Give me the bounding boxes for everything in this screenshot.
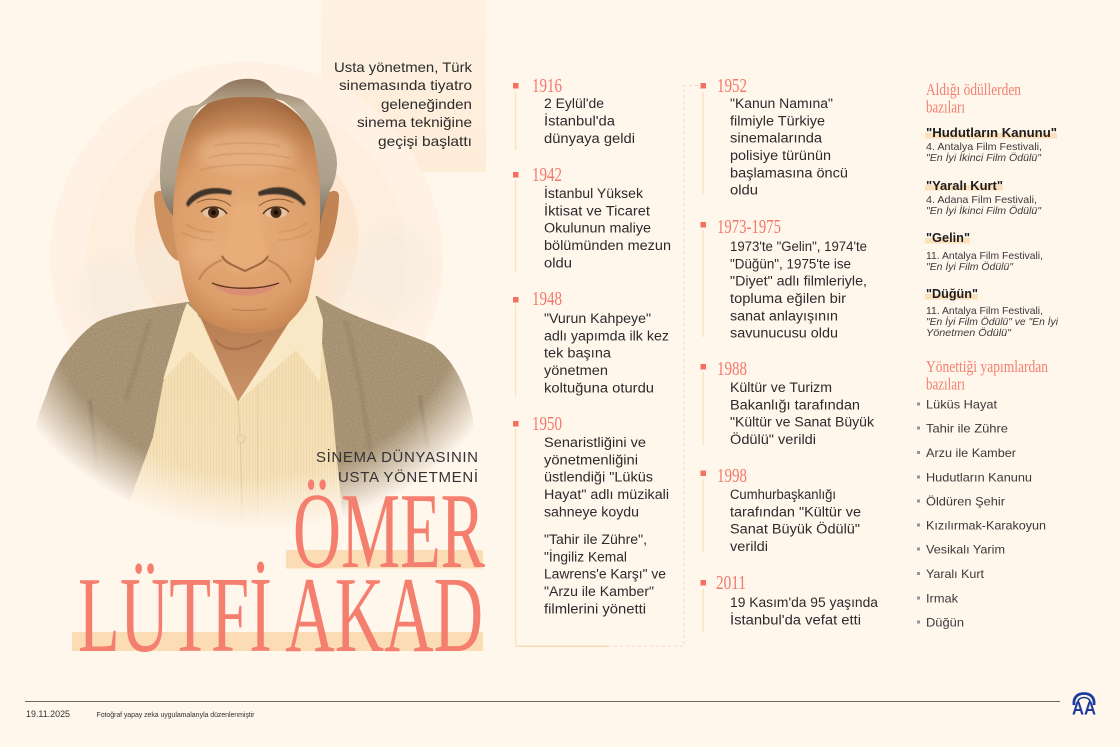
filmography panel bbox=[917, 357, 1048, 630]
quote text: sinemasında tiyatro bbox=[339, 77, 472, 93]
face bbox=[172, 92, 321, 333]
film list: Yaralı Kurt bbox=[926, 567, 985, 581]
event: 2011: 19 Kasım'da 95 yaşında bbox=[730, 595, 879, 610]
event: 1988: Bakanlığı tarafından bbox=[730, 397, 860, 412]
filmography heading: Yönettiği yapımlardan bbox=[926, 357, 1048, 376]
award: Düğün: Yönetmen Ödülü" bbox=[926, 327, 1012, 339]
portrait illustration bbox=[30, 62, 480, 540]
quote text: geçişi başlattı bbox=[378, 133, 472, 149]
event: 1950: sahneye koydu bbox=[544, 504, 639, 519]
event: 1950: "Tahir ile Zühre", bbox=[544, 532, 647, 547]
ears bbox=[154, 191, 339, 261]
event: 1973-1975: 1973'te "Gelin", 1974'te bbox=[730, 239, 867, 254]
film list: Tahir ile Zühre bbox=[926, 422, 1008, 436]
event: 1942: İstanbul Yüksek bbox=[544, 186, 643, 201]
film list: Irmak bbox=[926, 592, 959, 606]
timeline column 1 bbox=[513, 75, 671, 646]
watercolor washes bbox=[74, 222, 435, 335]
film list: Arzu ile Kamber bbox=[926, 446, 1016, 460]
event: 1942: 1942 bbox=[532, 164, 562, 186]
award: Gelin: "Gelin" bbox=[926, 230, 970, 245]
event: 2011: 2011 bbox=[716, 572, 746, 594]
award: Yaralı Kurt: 4. Adana Film Festivali, bbox=[926, 194, 1037, 206]
awards heading: Aldığı ödüllerden bbox=[926, 80, 1021, 99]
title: name: LÜTFİ AKAD bbox=[78, 556, 483, 675]
event: 1998: 1998 bbox=[717, 465, 747, 487]
event: 1988: Ödülü" verildi bbox=[730, 432, 816, 447]
event: 1988: 1988 bbox=[717, 358, 747, 380]
title: name bbox=[72, 472, 485, 675]
event: 1988: "Kültür ve Sanat Büyük bbox=[730, 415, 874, 430]
event: 1973-1975: "Düğün", 1975'te ise bbox=[730, 256, 851, 271]
award: Gelin bbox=[925, 230, 1043, 273]
event: 1950: "İngiliz Kemal bbox=[544, 549, 627, 564]
quote background panel bbox=[321, 0, 486, 172]
award: Yaralı Kurt: "Yaralı Kurt" bbox=[926, 178, 1003, 193]
event: 1950: yönetmenliğini bbox=[544, 452, 638, 467]
award: Gelin: 11. Antalya Film Festivali, bbox=[926, 250, 1043, 262]
award: Düğün: "En İyi Film Ödülü" ve "En İyi bbox=[926, 316, 1059, 328]
event: 1942: İktisat ve Ticaret bbox=[544, 203, 650, 218]
shirt button bbox=[237, 435, 245, 443]
event: 1998: verildi bbox=[730, 539, 768, 554]
eyebrows bbox=[186, 187, 306, 207]
eyes bbox=[197, 199, 293, 218]
forehead wrinkles bbox=[200, 143, 296, 170]
award: Hudutların Kanunu: "En İyi İkinci Film Ödülü" bbox=[926, 152, 1042, 164]
event: 1973-1975: topluma eğilen bir bbox=[730, 291, 847, 306]
event: 1948: adlı yapımda ilk kez bbox=[544, 328, 669, 343]
event: 1916: 2 Eylül'de bbox=[544, 96, 604, 111]
event: 1973-1975: savunucusu oldu bbox=[730, 326, 838, 341]
event: 1950: Senaristliğini ve bbox=[544, 435, 646, 450]
event: 1998: tarafından "Kültür ve bbox=[730, 504, 861, 519]
award: Hudutların Kanunu bbox=[925, 125, 1057, 164]
event: 1950: üstlendiği "Lüküs bbox=[544, 470, 653, 485]
event: 1950: 1950 bbox=[532, 413, 562, 435]
event: 1942: bölümünden mezun bbox=[544, 238, 671, 253]
filmography heading: bazıları bbox=[926, 374, 965, 394]
event: 1948: 1948 bbox=[532, 288, 562, 310]
quote text: Usta yönetmen, Türk bbox=[334, 59, 473, 75]
film list: Lüküs Hayat bbox=[926, 398, 998, 412]
event: 1952: 1952 bbox=[717, 75, 747, 97]
event: 1952: polisiye türünün bbox=[730, 148, 831, 163]
event: 1916: 1916 bbox=[532, 75, 562, 97]
event: 1988: Kültür ve Turizm bbox=[730, 380, 832, 395]
hair bbox=[160, 79, 337, 224]
event: 1952: oldu bbox=[730, 183, 758, 198]
body with cardigan and shirt bbox=[36, 288, 474, 524]
award: Gelin: "En İyi Film Ödülü" bbox=[926, 261, 1014, 273]
event: 1950: "Arzu ile Kamber" bbox=[544, 584, 654, 599]
shirt collar bbox=[163, 303, 238, 402]
event: 1948: "Vurun Kahpeye" bbox=[544, 311, 651, 326]
event: 1948 bbox=[513, 288, 669, 397]
event: 2011: İstanbul'da vefat etti bbox=[730, 612, 861, 627]
event: 1952: filmiyle Türkiye bbox=[730, 113, 825, 128]
cheek folds bbox=[199, 260, 291, 283]
event: 1952 bbox=[700, 75, 848, 198]
mouth bbox=[212, 283, 279, 310]
event: 1952: "Kanun Namına" bbox=[730, 96, 833, 111]
filmography heading bbox=[926, 357, 1048, 394]
title: name: ÖMER bbox=[293, 472, 485, 591]
event: 1942: Okulunun maliye bbox=[544, 221, 651, 236]
award: Düğün: "Düğün" bbox=[926, 286, 978, 301]
event: 1973-1975 bbox=[700, 216, 867, 341]
event: 1916: İstanbul'da bbox=[544, 114, 616, 128]
event: 1973-1975: sanat anlayışının bbox=[730, 308, 838, 323]
quote text: geleneğinden bbox=[381, 96, 472, 112]
film list: Hudutların Kanunu bbox=[926, 470, 1032, 484]
event: 1998: Sanat Büyük Ödülü" bbox=[730, 522, 860, 537]
event: 2011 bbox=[700, 572, 879, 632]
event: 1916 bbox=[513, 75, 635, 150]
neck bbox=[200, 316, 289, 402]
event: 1942 bbox=[513, 164, 671, 272]
event: 1950: filmlerini yönetti bbox=[544, 601, 646, 616]
award: Düğün: 11. Antalya Film Festivali, bbox=[926, 305, 1043, 317]
event: 1948: yönetmen bbox=[544, 363, 608, 378]
event: 1952: başlamasına öncü bbox=[730, 165, 848, 180]
subtitle bbox=[316, 448, 478, 486]
event: 1948: koltuğuna oturdu bbox=[544, 380, 654, 395]
inner halo circle bbox=[134, 128, 358, 352]
event: 1973-1975: "Diyet" adlı filmleriyle, bbox=[730, 274, 867, 289]
event: 1948: tek başına bbox=[544, 346, 612, 361]
event: 1916: dünyaya geldi bbox=[544, 131, 635, 146]
quote text bbox=[334, 59, 473, 149]
event: 1950 bbox=[513, 413, 669, 646]
event: 1973-1975: 1973-1975 bbox=[717, 216, 781, 238]
event: 1998: Cumhurbaşkanlığı bbox=[730, 487, 836, 502]
outer halo circle bbox=[50, 62, 442, 454]
event: 1988 bbox=[700, 358, 874, 447]
nose bbox=[222, 205, 268, 272]
event: 1998 bbox=[700, 465, 861, 554]
event: 1950: Lawrens'e Karşı" ve bbox=[544, 567, 666, 582]
middle halo circle bbox=[86, 98, 406, 418]
award: Düğün bbox=[925, 286, 1059, 339]
footer note: Fotoğraf yapay zeka uygulamalarıyla düzenlenmiştir bbox=[96, 712, 255, 719]
award: Yaralı Kurt: "En İyi İkinci Film Ödülü" bbox=[926, 205, 1042, 217]
icon: AA logo: AA bbox=[1072, 698, 1096, 718]
timeline connector bbox=[515, 86, 702, 647]
film list: Vesikalı Yarim bbox=[926, 542, 1005, 556]
subtitle: SİNEMA DÜNYASININ bbox=[316, 448, 478, 466]
award: Hudutların Kanunu: 4. Antalya Film Festivali, bbox=[926, 141, 1042, 153]
film list bbox=[917, 398, 1046, 630]
event: 1942: oldu bbox=[544, 255, 572, 270]
film list: Düğün bbox=[926, 616, 964, 630]
subtitle: USTA YÖNETMENİ bbox=[338, 468, 478, 486]
awards heading bbox=[926, 80, 1021, 116]
event: 1952: sinemalarında bbox=[730, 131, 823, 146]
awards panel bbox=[925, 80, 1059, 339]
eye wrinkles bbox=[182, 222, 312, 240]
film list: Kızılırmak-Karakoyun bbox=[926, 518, 1046, 532]
film list: Öldüren Şehir bbox=[926, 494, 1005, 508]
event: 1950: Hayat" adlı müzikali bbox=[544, 487, 669, 502]
award: Hudutların Kanunu: "Hudutların Kanunu" bbox=[926, 125, 1057, 140]
awards heading: bazıları bbox=[926, 98, 965, 116]
quote text: sinema tekniğine bbox=[357, 114, 472, 130]
footer date: 19.11.2025 bbox=[26, 709, 70, 720]
timeline column 2 bbox=[700, 75, 879, 632]
award: Yaralı Kurt bbox=[925, 178, 1042, 217]
